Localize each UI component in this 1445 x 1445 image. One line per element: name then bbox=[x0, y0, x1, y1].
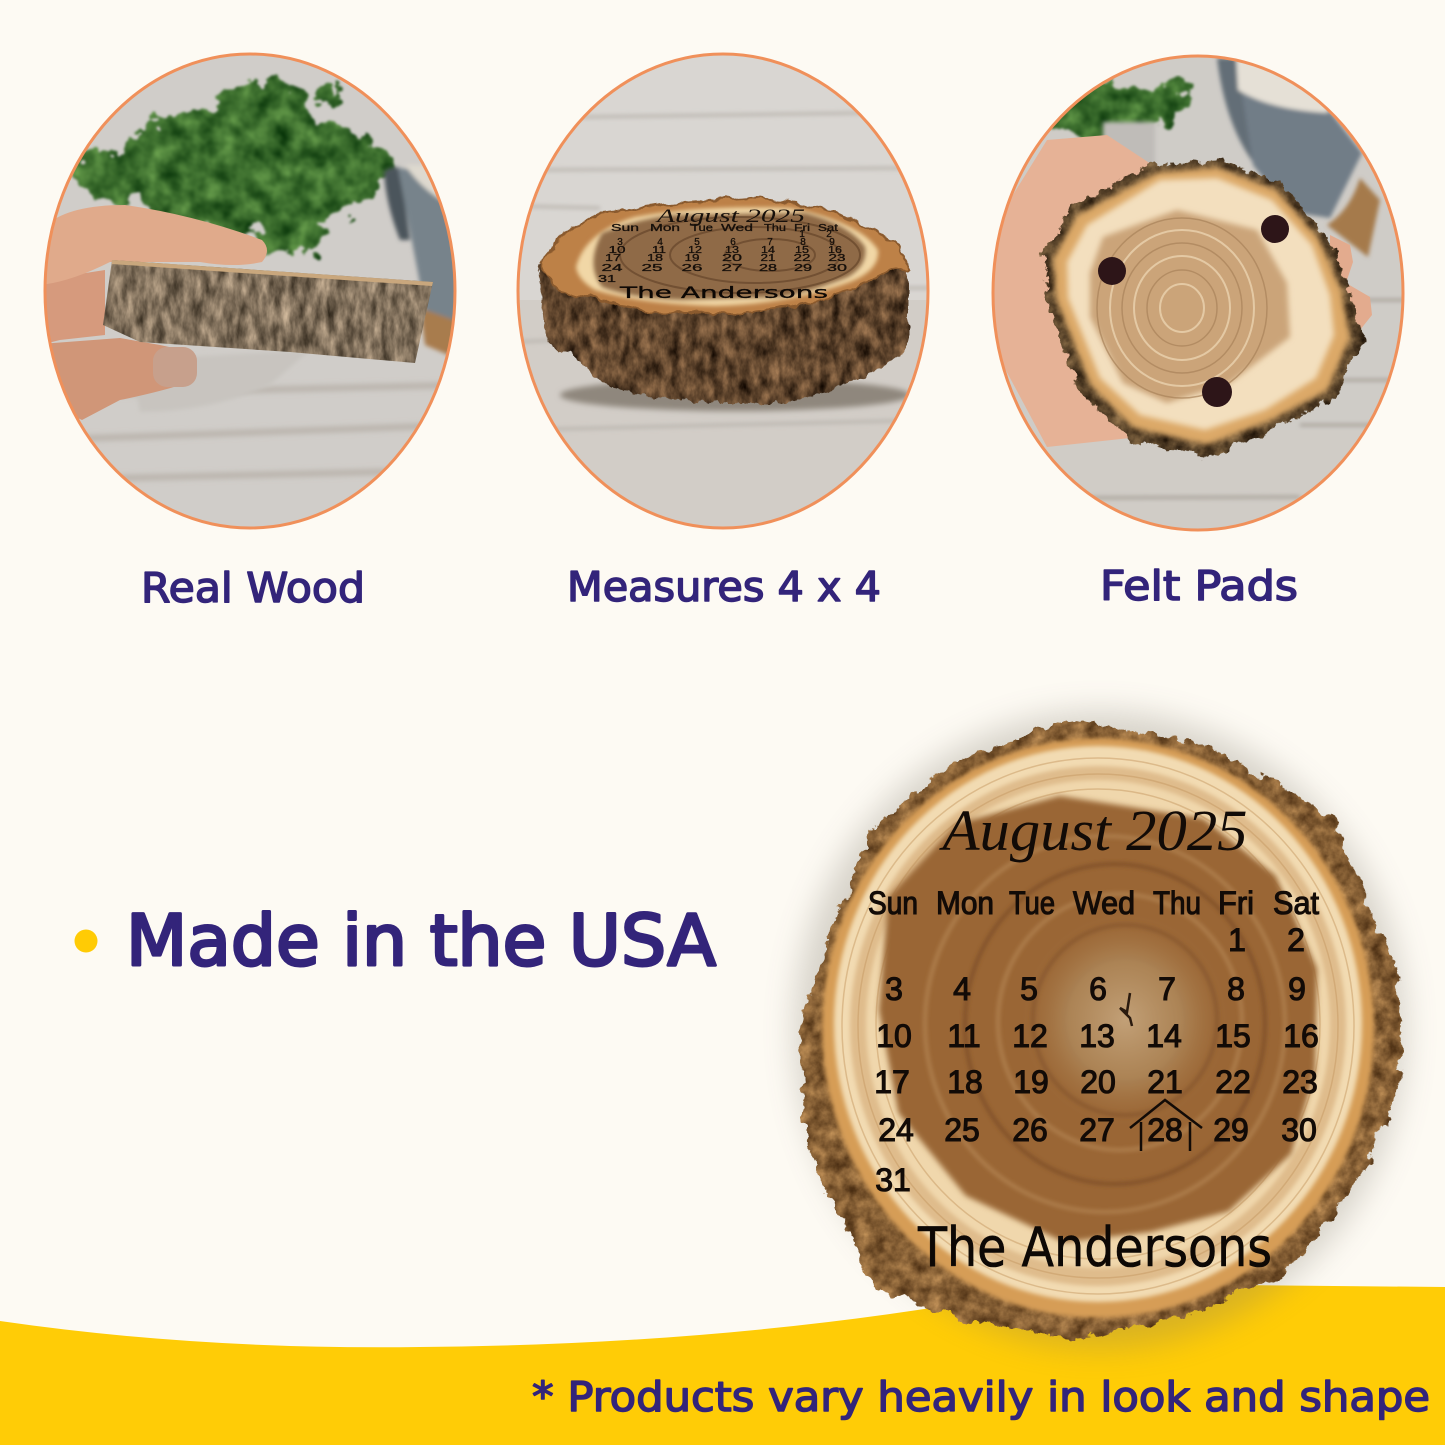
mini calendar: 25 bbox=[642, 263, 663, 274]
golden cambium bbox=[822, 738, 1374, 1318]
calendar title: August 2025 bbox=[938, 798, 1248, 863]
mini calendar: 24 bbox=[602, 263, 623, 274]
dates: 22 bbox=[1215, 1064, 1251, 1100]
cream sapwood bbox=[576, 207, 878, 306]
dates: 5 bbox=[1020, 971, 1038, 1007]
ring bbox=[45, 54, 455, 528]
bullet point bbox=[74, 930, 98, 952]
thumb nail bbox=[153, 347, 197, 387]
mini calendar: 3 bbox=[617, 237, 623, 248]
dates: 10 bbox=[876, 1018, 912, 1054]
mini calendar: The Andersons bbox=[618, 283, 828, 302]
plant bbox=[1043, 84, 1193, 145]
footer note: * Products vary heavily in look and shape bbox=[532, 1373, 1430, 1421]
mini calendar: 15 bbox=[795, 245, 810, 256]
family name: The Andersons bbox=[917, 1216, 1272, 1279]
dates: 15 bbox=[1215, 1018, 1251, 1054]
photo circle: measures bbox=[510, 50, 935, 535]
felt pads bbox=[1098, 257, 1126, 285]
caption: measures: Measures 4 x 4 bbox=[567, 563, 881, 611]
mini calendar: 11 bbox=[652, 245, 667, 256]
icon: house around 28 bbox=[1130, 1100, 1202, 1151]
dates: 23 bbox=[1282, 1064, 1318, 1100]
mug bbox=[1217, 55, 1362, 218]
mini calendar: 26 bbox=[682, 263, 703, 274]
dates: 25 bbox=[944, 1112, 980, 1148]
weekday header: Fri bbox=[1218, 885, 1254, 921]
mini calendar: 16 bbox=[828, 245, 843, 256]
mini calendar: Thu bbox=[764, 223, 786, 234]
mini calendar: 6 bbox=[730, 237, 736, 248]
plant bbox=[75, 78, 390, 255]
slice back bbox=[1043, 160, 1363, 458]
mini calendar: Mon bbox=[650, 223, 680, 234]
bark side bbox=[538, 265, 908, 403]
cream sapwood bbox=[834, 746, 1362, 1302]
bark edge bbox=[800, 718, 1403, 1340]
mini calendar: 21 bbox=[760, 253, 776, 264]
weekday header: Sun bbox=[868, 885, 918, 921]
photo circle: real wood bbox=[40, 50, 460, 535]
dates: 13 bbox=[1079, 1018, 1115, 1054]
mini calendar: Sat bbox=[818, 223, 838, 234]
mini calendar: 29 bbox=[794, 263, 813, 274]
dates: 16 bbox=[1283, 1018, 1319, 1054]
mini calendar: 19 bbox=[684, 253, 700, 264]
mini calendar bbox=[598, 206, 848, 302]
top face bbox=[538, 197, 908, 314]
mini calendar: 5 bbox=[694, 237, 700, 248]
dates: 31 bbox=[875, 1162, 911, 1198]
mini calendar: 28 bbox=[759, 263, 778, 274]
footer yellow wave bbox=[0, 1285, 1445, 1445]
pale core bbox=[1020, 912, 1230, 1128]
mini calendar: 7 bbox=[767, 237, 773, 248]
ring bbox=[518, 54, 928, 528]
mini calendar: 20 bbox=[722, 253, 743, 264]
mini calendar: 17 bbox=[605, 253, 622, 264]
dates: 8 bbox=[1227, 971, 1245, 1007]
mini calendar: 2 bbox=[826, 229, 832, 240]
weekday header bbox=[868, 885, 1319, 921]
hand: lower palm bbox=[46, 270, 105, 342]
dates: 14 bbox=[1146, 1018, 1182, 1054]
dates: 29 bbox=[1213, 1112, 1249, 1148]
dates: 21 bbox=[1147, 1064, 1183, 1100]
heartwood bbox=[594, 213, 865, 300]
mug bbox=[384, 165, 460, 360]
dates: 20 bbox=[1080, 1064, 1116, 1100]
dates: 26 bbox=[1012, 1112, 1048, 1148]
photo circle: felt pads bbox=[985, 50, 1410, 540]
dates: 19 bbox=[1013, 1064, 1049, 1100]
growth rings bbox=[925, 836, 1285, 1212]
heartwood bbox=[1090, 210, 1290, 403]
dates: 2 bbox=[1287, 922, 1305, 958]
mini calendar: 13 bbox=[725, 245, 740, 256]
calendar grid bbox=[868, 885, 1319, 1198]
pot bbox=[1103, 122, 1155, 167]
coaster bbox=[1327, 178, 1380, 257]
dates: 6 bbox=[1089, 971, 1107, 1007]
dates: 27 bbox=[1079, 1112, 1115, 1148]
dates bbox=[874, 922, 1319, 1198]
weekday header: Thu bbox=[1153, 885, 1201, 921]
mini calendar: 18 bbox=[647, 253, 664, 264]
weekday header: Tue bbox=[1009, 885, 1055, 921]
table shadow bbox=[560, 379, 910, 411]
weekday header: Mon bbox=[936, 885, 994, 921]
pith crack bbox=[1120, 993, 1132, 1026]
dates: 1 bbox=[1228, 922, 1246, 958]
dates: 24 bbox=[878, 1112, 914, 1148]
wood slice calendar bbox=[795, 712, 1405, 1348]
pot bbox=[140, 353, 302, 410]
mini calendar: 23 bbox=[828, 253, 846, 264]
hand: fingertips bbox=[1330, 235, 1372, 330]
weekday header: Sat bbox=[1273, 885, 1319, 921]
mini calendar: 1 bbox=[799, 229, 805, 240]
dates: 9 bbox=[1288, 971, 1306, 1007]
dates: 18 bbox=[947, 1064, 983, 1100]
heading: made in the usa: Made in the USA bbox=[126, 900, 716, 982]
dates: 17 bbox=[874, 1064, 910, 1100]
mini calendar: 30 bbox=[827, 263, 848, 274]
caption: real wood: Real Wood bbox=[141, 564, 365, 612]
heartwood bbox=[886, 803, 1310, 1235]
mini calendar: 14 bbox=[761, 245, 776, 256]
dates: 12 bbox=[1012, 1018, 1048, 1054]
mini calendar: 8 bbox=[800, 237, 806, 248]
mini calendar: 22 bbox=[794, 253, 811, 264]
mini calendar: 31 bbox=[598, 274, 617, 285]
mini calendar: Fri bbox=[794, 223, 810, 234]
mini calendar: Sun bbox=[611, 223, 639, 234]
dates: 11 bbox=[947, 1018, 981, 1054]
weekday header: Wed bbox=[1073, 885, 1135, 921]
dates: 7 bbox=[1158, 971, 1176, 1007]
slice side view bbox=[103, 260, 433, 363]
dates: 3 bbox=[885, 971, 903, 1007]
mini calendar: Tue bbox=[691, 223, 714, 234]
mini calendar: 9 bbox=[829, 237, 835, 248]
dates: 4 bbox=[953, 971, 971, 1007]
mini calendar: Wed bbox=[721, 223, 753, 234]
mini calendar: August 2025 bbox=[654, 206, 805, 227]
hand: index finger bbox=[40, 205, 267, 285]
mini calendar: 4 bbox=[657, 237, 663, 248]
hand: thumb bbox=[52, 338, 174, 420]
mini calendar: 12 bbox=[688, 245, 703, 256]
mini calendar: 27 bbox=[722, 263, 743, 274]
hand: palm bbox=[994, 135, 1149, 447]
ring bbox=[993, 56, 1403, 530]
mini calendar: 10 bbox=[608, 245, 626, 256]
sapwood bbox=[1067, 178, 1334, 430]
caption: felt pads: Felt Pads bbox=[1100, 562, 1298, 610]
dates: 30 bbox=[1281, 1112, 1317, 1148]
dates: 28 bbox=[1147, 1112, 1183, 1148]
